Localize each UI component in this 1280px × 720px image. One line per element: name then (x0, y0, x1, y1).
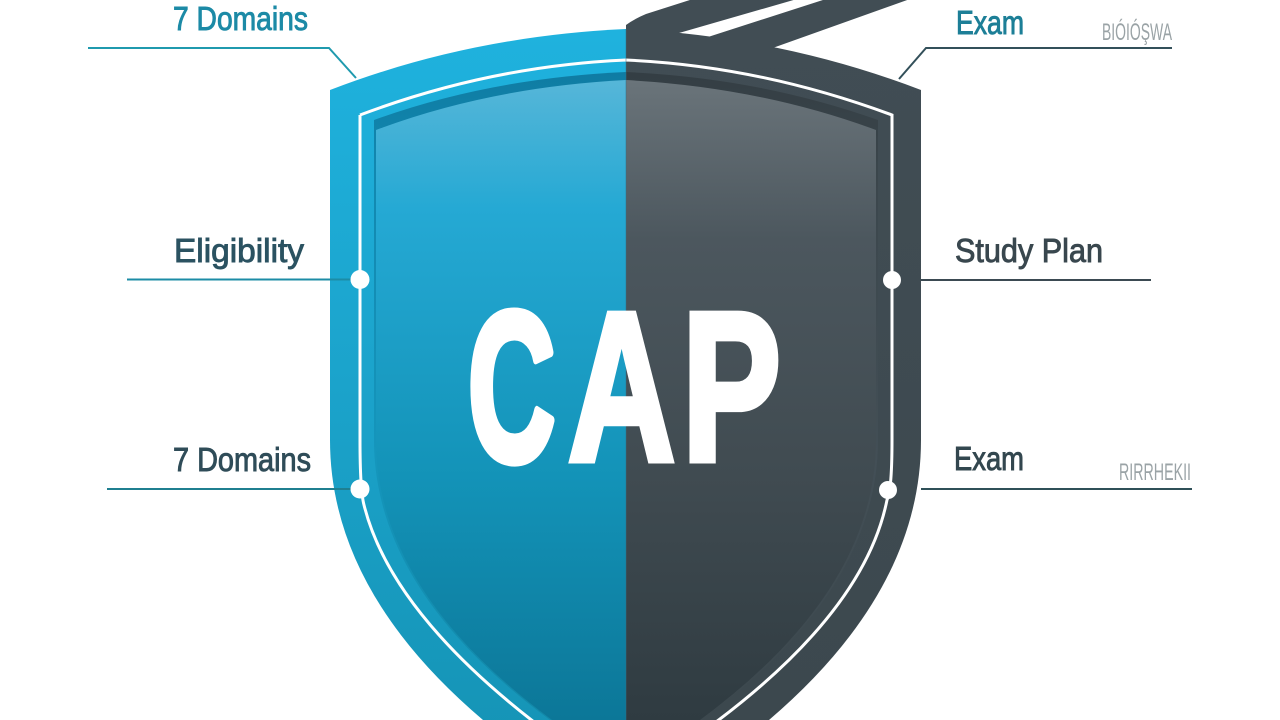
letter P: P (682, 268, 781, 505)
label text: Study Plan (955, 232, 1103, 269)
label text: 7 Domains (173, 0, 308, 37)
label text: Exam (956, 4, 1024, 41)
connector dot (350, 270, 370, 289)
shield inner panel: left half (376, 80, 627, 720)
ribbon: top right folded band (626, 0, 910, 60)
shield outer band: right half (625, 29, 921, 720)
shield inner rim: right half (626, 72, 878, 154)
label text: 7 Domains (173, 441, 311, 478)
shield (330, 0, 921, 720)
connector dot (879, 481, 897, 499)
callout: top right Exam (899, 4, 1172, 79)
connector dot (350, 480, 370, 498)
leader line (127, 278, 352, 280)
callout: top left 7 Domains (88, 0, 356, 78)
leader line (921, 279, 1151, 281)
callout: lower right Exam (879, 440, 1192, 499)
small caption: BIÓIÓŞWA (1102, 19, 1172, 46)
callout: lower left 7 Domains (107, 441, 370, 498)
leader line (899, 48, 1172, 79)
small caption: RIRRHEKII (1119, 459, 1191, 486)
shield white outline (360, 60, 892, 720)
label text: Eligibility (174, 232, 305, 269)
shield outer band: left half (330, 29, 627, 720)
title: CAP (468, 268, 781, 505)
leader line (88, 48, 356, 78)
label text: Exam (954, 440, 1024, 477)
callout: Study Plan (883, 232, 1151, 289)
callout: Eligibility (127, 232, 370, 289)
letter C: C (468, 268, 555, 505)
leader line (921, 488, 1192, 490)
leader line (107, 488, 352, 490)
connector dot (883, 271, 901, 289)
letter A: A (568, 268, 675, 505)
shield inner rim: left half (374, 72, 627, 720)
center divider (626, 29, 627, 720)
shield inner panel: right half (625, 80, 876, 720)
